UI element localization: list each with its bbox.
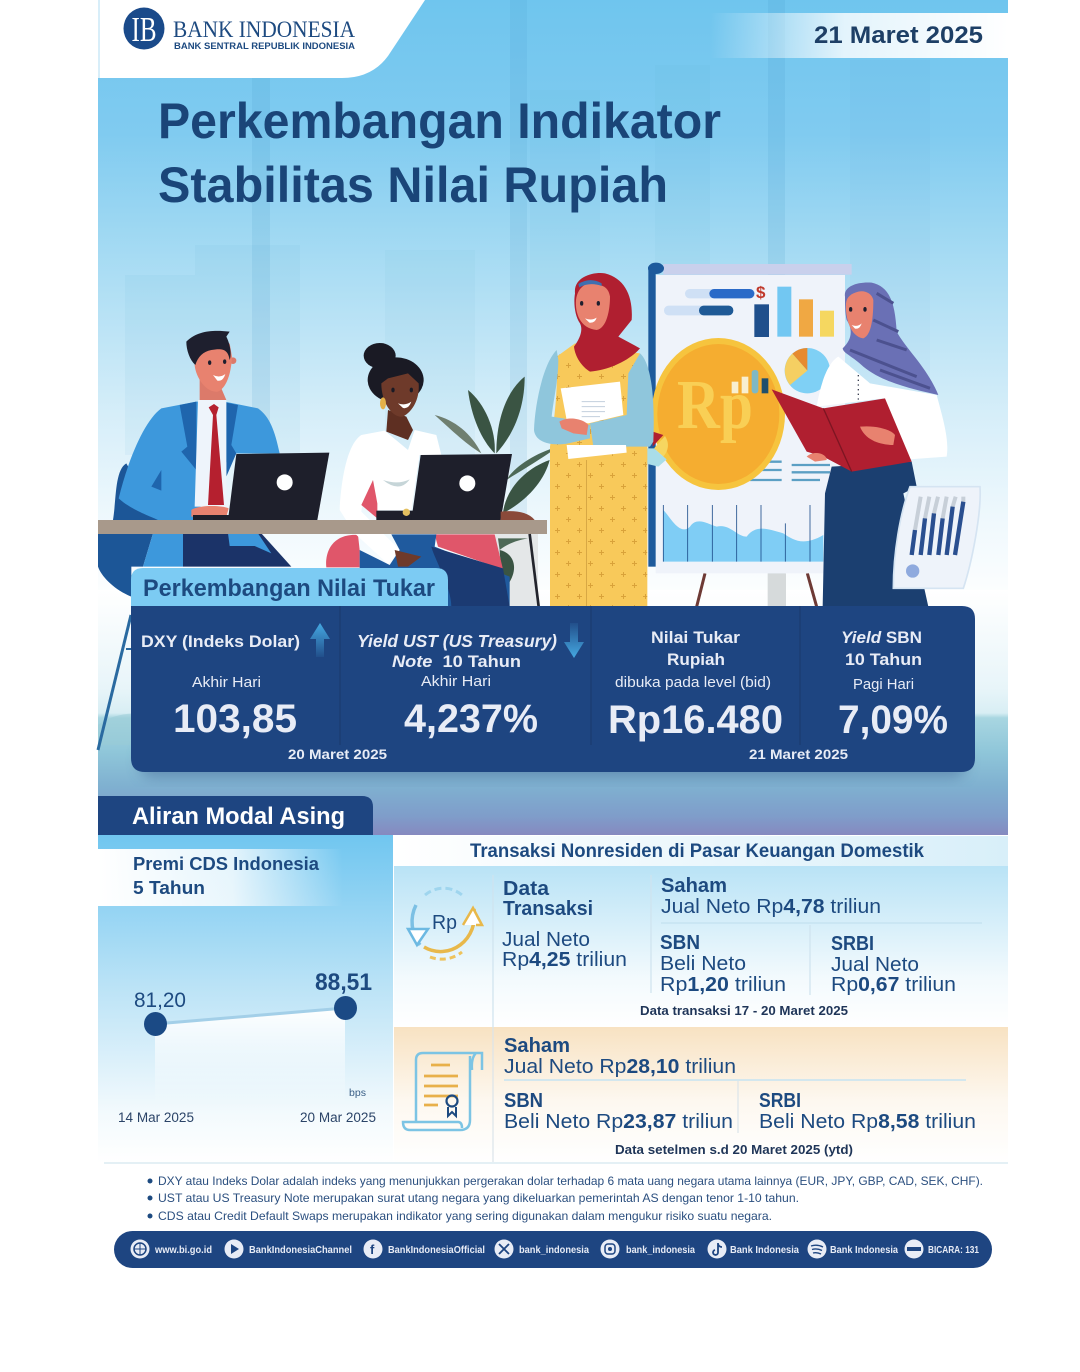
- column: Yield UST: Yield UST (US Treasury): [357, 631, 557, 651]
- arrow up: [310, 623, 330, 657]
- column: Yield SBN: Pagi Hari: [853, 677, 914, 693]
- icon: bicara: [904, 1240, 924, 1258]
- date banner: [710, 13, 1008, 58]
- title: Stabilitas Nilai Rupiah: [158, 157, 668, 213]
- CDS heading: Premi CDS Indonesia: [133, 854, 320, 874]
- icon: tiktok: [708, 1240, 726, 1258]
- section: data transaksi: [394, 866, 1008, 1163]
- transaction note: Data transaksi 17 - 20 Maret 2025: [640, 1003, 848, 1018]
- tab heading: [131, 568, 448, 606]
- column: Yield SBN: 10 Tahun: [845, 650, 922, 669]
- CDS line chart: bps: [349, 1088, 366, 1099]
- CDS line chart: 81,20: [134, 989, 186, 1012]
- panel: perkembangan nilai tukar: [131, 568, 975, 777]
- SRBI: SRBI: [831, 933, 874, 955]
- arrow down: [564, 623, 584, 658]
- column: Yield SBN: [838, 628, 948, 742]
- presentation board: [648, 263, 852, 607]
- column: Nilai Tukar Rupiah: Rupiah: [667, 650, 725, 669]
- SRBI: [831, 933, 956, 996]
- data transaksi summary: Rp4,25 triliun: [502, 949, 627, 971]
- column: Yield SBN: 7,09%: [838, 698, 948, 742]
- column: Yield UST: Akhir Hari: [421, 674, 491, 690]
- background buildings: [98, 0, 930, 750]
- icon: rupiah cycle: [408, 888, 482, 959]
- CDS line chart: [118, 969, 376, 1125]
- SBN: Rp1,20 triliun: [660, 974, 786, 996]
- icon: youtube: [224, 1240, 244, 1258]
- saham settlement: Jual Neto Rp 28,10 triliun: [504, 1056, 736, 1078]
- woman with purple hijab and red book: [772, 283, 947, 607]
- SBN settlement: [504, 1090, 733, 1133]
- saham: Jual Neto Rp 4,78 triliun: [661, 896, 881, 918]
- tab heading: Perkembangan Nilai Tukar: [143, 575, 435, 602]
- SBN settlement: Beli Neto Rp 23,87 triliun: [504, 1111, 733, 1133]
- heading: aliran modal asing: Aliran Modal Asing: [132, 803, 345, 830]
- illustration: team with presentation board: [98, 263, 980, 607]
- icon: document scroll: [403, 1053, 482, 1130]
- footer contact bar: [114, 1231, 992, 1268]
- table: [98, 520, 547, 607]
- title: Perkembangan Indikator: [158, 93, 721, 149]
- SRBI settlement: Beli Neto Rp 8,58 triliun: [759, 1111, 976, 1133]
- man with laptop: [98, 331, 329, 597]
- coin currency mark: Rp: [677, 367, 753, 444]
- icon: facebook: f: [370, 1242, 375, 1257]
- column: Nilai Tukar Rupiah: dibuka pada level (bid): [615, 675, 771, 691]
- SRBI: Jual Neto: [831, 954, 919, 976]
- column: DXY: DXY (Indeks Dolar): [141, 632, 300, 651]
- tablet with chart: [893, 487, 980, 588]
- date: 21 Maret 2025: 21 Maret 2025: [749, 746, 848, 762]
- icon: instagram: [600, 1240, 620, 1258]
- logo subtitle: BANK SENTRAL REPUBLIK INDONESIA: [174, 41, 355, 52]
- date: 20 Maret 2025: 20 Maret 2025: [288, 746, 387, 762]
- saham settlement: [504, 1035, 736, 1078]
- footnotes: UST atau US Treasury Note merupakan surat utang negara yang dikeluarkan pemerintah AS dengan tenor 1-10 tahun.: [158, 1191, 799, 1205]
- data transaksi summary: Data: [503, 878, 550, 900]
- saham settlement: Saham: [504, 1035, 570, 1057]
- icon: website: [130, 1240, 150, 1258]
- CDS line chart: 14 Mar 2025: [118, 1110, 194, 1125]
- contact: website: www.bi.go.id: [154, 1245, 212, 1256]
- SBN: SBN: [660, 932, 700, 954]
- board dollar sign: $: [756, 283, 766, 302]
- column: Yield UST: 4,237%: [404, 697, 538, 741]
- saham: [661, 875, 881, 918]
- panel: transaksi nonresiden: [393, 835, 1008, 1163]
- footnotes: DXY atau Indeks Dolar adalah indeks yang menunjukkan pergerakan dolar terhadap 6 mata uang negara utama lainnya (EUR, JPY, GBP, CAD, SEK, CHF).: [158, 1174, 983, 1188]
- settlement note: Data setelmen s.d 20 Maret 2025 (ytd): [615, 1142, 853, 1157]
- data transaksi summary: Jual Neto: [502, 929, 590, 951]
- CDS line chart: 20 Mar 2025: [300, 1110, 376, 1125]
- column: Nilai Tukar Rupiah: Nilai Tukar: [651, 628, 740, 647]
- background floor: [98, 590, 1008, 836]
- column: Nilai Tukar Rupiah: [608, 628, 783, 742]
- panel heading: [393, 836, 1008, 866]
- contact: X: bank_indonesia: [519, 1245, 589, 1256]
- data transaksi summary: Transaksi: [503, 898, 593, 920]
- SBN: [660, 932, 786, 996]
- contact: tiktok: Bank Indonesia: [730, 1245, 799, 1256]
- logo wordmark: BANK INDONESIA: [173, 17, 355, 43]
- column: Yield SBN: Yield SBN: [841, 628, 922, 647]
- CDS heading: 5 Tahun: [133, 878, 205, 898]
- icon: rupiah cycle: Rp: [432, 912, 457, 934]
- panel heading: Transaksi Nonresiden di Pasar Keuangan Domestik: [470, 841, 924, 862]
- date banner: 21 Maret 2025: [814, 22, 983, 49]
- saham: Saham: [661, 875, 727, 897]
- plant: [435, 377, 558, 607]
- column: DXY: [141, 623, 330, 741]
- icon: spotify: [808, 1240, 826, 1258]
- column: Yield UST: [357, 623, 584, 741]
- CDS line chart: 88,51: [315, 969, 372, 996]
- contact: instagram: bank_indonesia: [626, 1245, 695, 1256]
- title: [158, 93, 721, 213]
- woman with red hijab: [534, 273, 668, 607]
- SRBI settlement: SRBI: [759, 1090, 801, 1112]
- column: DXY: 103,85: [173, 697, 297, 741]
- coin: [652, 338, 785, 490]
- SRBI settlement: [759, 1090, 976, 1133]
- column: Yield UST: Note 10 Tahun: [392, 652, 521, 671]
- contact: spotify: Bank Indonesia: [830, 1245, 898, 1256]
- column: DXY: Akhir Hari: [192, 675, 261, 691]
- SRBI: Rp0,67 triliun: [831, 974, 956, 996]
- heading: aliran modal asing: [98, 796, 373, 835]
- section: data setelmen: [394, 1027, 1008, 1163]
- panel: premi CDS: [98, 835, 393, 1163]
- logo emblem: IB: [132, 10, 156, 49]
- SBN settlement: SBN: [504, 1090, 543, 1112]
- panel body: [131, 606, 975, 772]
- CDS heading: [98, 849, 343, 906]
- footnotes: [104, 1162, 1008, 1223]
- contact: facebook: BankIndonesiaOfficial: [388, 1245, 485, 1256]
- icon: facebook: [364, 1240, 382, 1258]
- woman with laptop: [326, 343, 535, 607]
- column: Nilai Tukar Rupiah: Rp16.480: [608, 698, 783, 742]
- contact: bicara: BICARA: 131: [928, 1245, 979, 1256]
- icon: X: [494, 1240, 514, 1258]
- panel shadow: [140, 745, 966, 777]
- contact: youtube: BankIndonesiaChannel: [249, 1245, 352, 1256]
- data transaksi summary: [502, 878, 627, 971]
- logo panel: [98, 0, 425, 78]
- footnotes: CDS atau Credit Default Swaps merupakan indikator yang sering digunakan dalam mengukur risiko suatu negara.: [158, 1209, 772, 1223]
- SBN: Beli Neto: [660, 953, 746, 975]
- background sky: [98, 0, 1008, 610]
